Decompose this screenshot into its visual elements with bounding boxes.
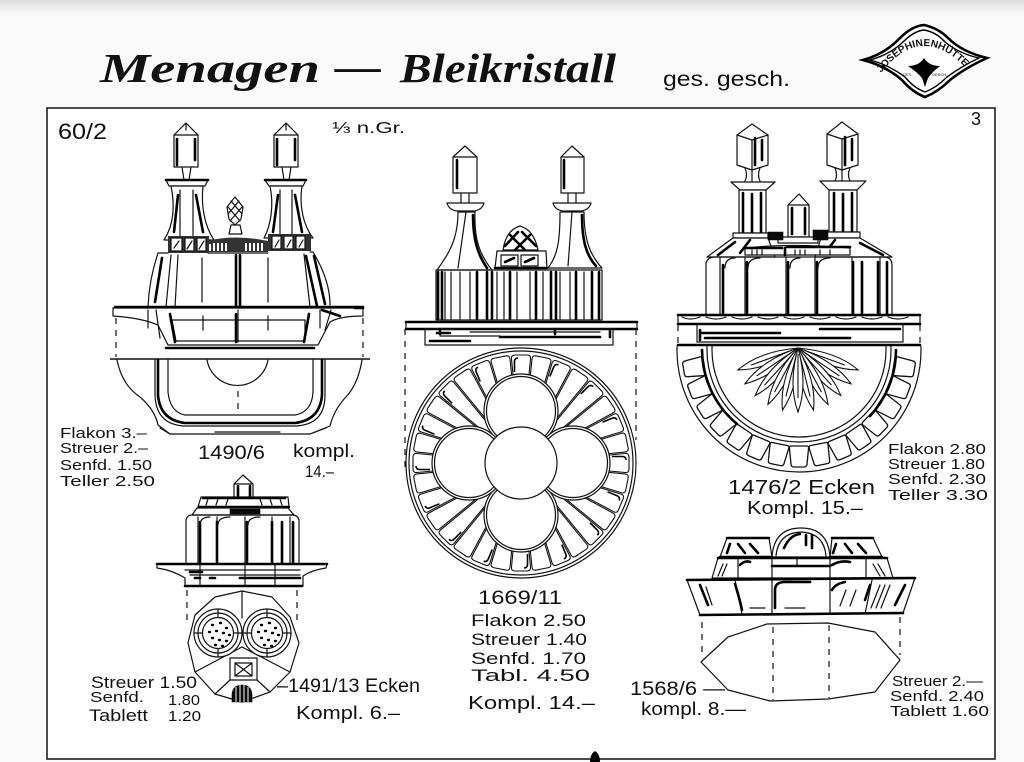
price list: Tablett 1.60 — [890, 703, 989, 720]
price list: Flakon 2.80 — [888, 441, 986, 458]
model label — [198, 441, 355, 481]
lower tray — [687, 578, 915, 615]
price list: Tabl. 4.50 — [471, 666, 590, 685]
left bottle — [437, 146, 492, 270]
panel: cruet set 1490/6 — [60, 123, 370, 490]
price list: 1669/11 — [478, 588, 562, 609]
model label — [277, 676, 420, 723]
price list: Flakon 2.50 — [471, 611, 586, 630]
glass body — [148, 252, 330, 307]
scale note: ⅓ n.Gr. — [332, 120, 405, 137]
fluted body — [706, 257, 892, 315]
plate side view — [678, 315, 920, 345]
price list — [888, 441, 988, 504]
fluted base — [436, 270, 602, 320]
price list: Senfd. 2.40 — [890, 688, 984, 705]
lidded tops — [745, 230, 850, 255]
price list: Streuer 2.— — [892, 673, 983, 690]
price list: 1.80 — [168, 692, 200, 709]
price list: Tablett — [89, 706, 148, 725]
dashed projection lines — [405, 329, 636, 470]
price list — [468, 588, 595, 713]
title: Bleikristall — [399, 45, 617, 91]
model label: –1491/13 Ecken — [277, 676, 420, 697]
right bottle — [815, 122, 892, 257]
model label: Kompl. 15.– — [747, 498, 863, 518]
title: — — [334, 43, 381, 89]
price list: Senfd. 2.30 — [888, 471, 986, 488]
right bottle — [548, 146, 602, 268]
price list: Streuer 1.50 — [91, 673, 197, 692]
panel: cruet set 1491/13 Ecken — [89, 475, 420, 725]
left bottle — [164, 123, 214, 253]
section line and dashes — [110, 358, 370, 360]
dodecagon plan view — [188, 591, 299, 702]
star cut — [736, 343, 860, 412]
price list: 1.20 — [168, 708, 201, 725]
mustard pot with pineapple lid — [207, 197, 268, 252]
model label: 14.– — [305, 462, 334, 481]
logo: Josephinenhütte badge: JOSEPHINENHÜTTE — [877, 39, 970, 72]
price list — [60, 425, 155, 490]
model label: 1476/2 Ecken — [728, 477, 875, 499]
model label: 1490/6 — [198, 443, 265, 464]
salt shaker — [778, 194, 818, 243]
subtitle: registered design note: ges. gesch. — [663, 68, 790, 91]
panel: cruet set 1669/11 — [405, 146, 637, 713]
punch mark — [590, 751, 600, 762]
price list: Streuer 1.80 — [888, 456, 985, 473]
model label: kompl. 8.— — [641, 699, 746, 719]
dashed projection lines — [702, 617, 900, 700]
model label: 1568/6 — — [630, 679, 725, 700]
dashed projection lines — [678, 325, 920, 344]
logo: Josephinenhütte badge: GES. — [903, 72, 913, 77]
price list — [89, 673, 201, 725]
plate plan view — [117, 360, 362, 434]
price list: Senfd. 1.50 — [60, 457, 152, 474]
price list: Flakon 3.– — [60, 425, 148, 442]
tray side view — [157, 564, 327, 586]
panel: cruet set 1476/2 Ecken — [677, 122, 988, 518]
model label — [728, 477, 875, 518]
page number: 3 — [971, 109, 981, 129]
title — [99, 43, 617, 91]
dashed projection lines — [187, 590, 297, 625]
price list: Teller 3.30 — [888, 487, 988, 504]
mustard pot — [495, 226, 547, 268]
middle row — [712, 558, 893, 578]
plan view outline — [701, 623, 900, 701]
catalogue number: 60/2 — [58, 119, 107, 144]
plate side view — [113, 307, 363, 348]
price list: Streuer 2.– — [60, 440, 149, 457]
main frame — [47, 108, 995, 759]
price list: Teller 2.50 — [60, 473, 155, 490]
right bottle — [264, 123, 313, 251]
price list: Kompl. 14.– — [468, 693, 595, 713]
left bottle — [707, 124, 775, 257]
plate side view — [406, 322, 637, 345]
shaker knob — [234, 475, 253, 502]
title: Menagen — [99, 45, 320, 91]
round plate plan view — [406, 348, 636, 578]
model label — [630, 679, 746, 719]
price list: Streuer 1.40 — [471, 630, 587, 649]
dome lid — [772, 528, 830, 557]
price list: Senfd. — [90, 689, 144, 706]
price list — [890, 673, 989, 720]
left and right lids — [720, 538, 882, 557]
fluted body — [186, 515, 299, 563]
panel: cruet set 1568/6 — [630, 528, 989, 720]
price list: Senfd. 1.70 — [471, 649, 586, 668]
upper lid band — [192, 497, 294, 515]
model label: Kompl. 6.– — [296, 703, 400, 723]
model label: kompl. — [293, 441, 355, 461]
logo: Josephinenhütte badge: GESCH. — [932, 72, 947, 77]
logo: Josephinenhütte badge — [858, 24, 991, 98]
half plate plan view — [676, 346, 922, 473]
